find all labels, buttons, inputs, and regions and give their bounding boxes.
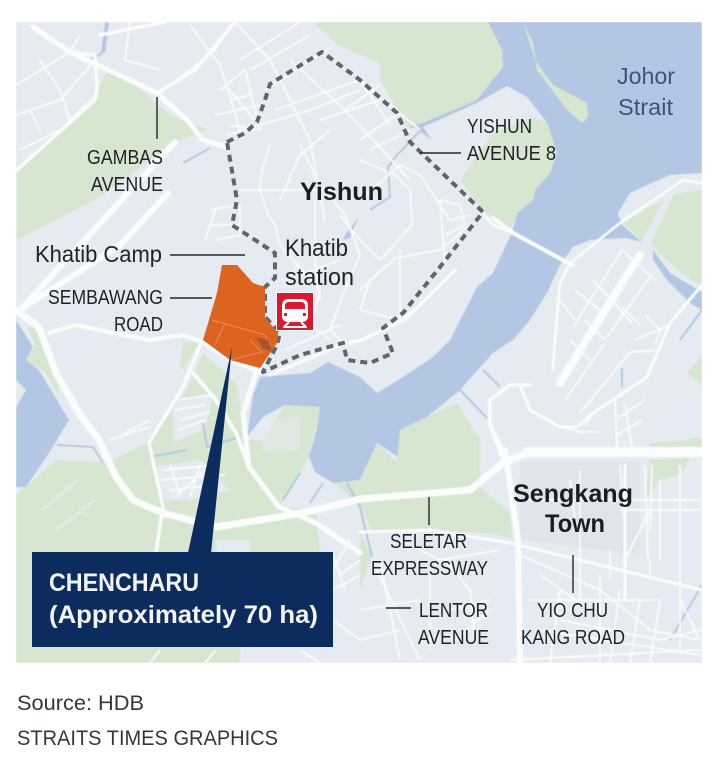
- label: Khatib Camp: Khatib Camp: [35, 241, 162, 267]
- label: Yio Chu Kang Road: [521, 600, 625, 649]
- label: Sembawang Road: SEMBAWANG: [48, 287, 163, 309]
- Yishun town boundary (dashed): [227, 52, 483, 372]
- label: Sembawang Road: ROAD: [114, 314, 163, 336]
- label: Lentor Avenue: [418, 600, 489, 649]
- label: Lentor Avenue: AVENUE: [418, 627, 489, 649]
- label: Gambas Avenue: [87, 147, 163, 196]
- label: Gambas Avenue: GAMBAS: [87, 147, 163, 169]
- built-up darker patch Sengkang: [520, 462, 640, 555]
- label: Johor Strait: [617, 63, 675, 120]
- callout box: Chencharu: [32, 552, 333, 647]
- map panel: [16, 22, 703, 663]
- source credit: [17, 692, 278, 750]
- waterways: [57, 22, 702, 640]
- green areas: [16, 22, 702, 663]
- water: Johor Strait and Seletar reservoir: [16, 22, 702, 487]
- label: Khatib station: [285, 235, 354, 291]
- source credit: Source: HDB: [17, 692, 144, 715]
- minor roads: [16, 22, 700, 663]
- major roads: [16, 22, 703, 663]
- label: Sembawang Road: [48, 287, 163, 336]
- pale stripes in green: [42, 480, 95, 530]
- label: Sengkang Town: Sengkang: [513, 480, 633, 508]
- label: Lentor Avenue: LENTOR: [419, 600, 488, 622]
- label: Sengkang Town: Town: [545, 510, 605, 538]
- label: Yishun Avenue 8: YISHUN: [467, 116, 532, 138]
- label: Khatib station: Khatib: [285, 235, 348, 262]
- callout box: Chencharu: CHENCHARU: [49, 569, 199, 597]
- land patches: [59, 196, 673, 552]
- source credit: STRAITS TIMES GRAPHICS: [17, 727, 278, 750]
- label: Yishun Avenue 8: [467, 116, 556, 165]
- label: Gambas Avenue: AVENUE: [91, 174, 163, 196]
- label: Seletar Expressway: [371, 531, 488, 580]
- label: Yio Chu Kang Road: KANG ROAD: [521, 627, 625, 649]
- label: Johor Strait: Johor: [617, 63, 675, 89]
- label: Yishun Avenue 8: AVENUE 8: [467, 143, 556, 165]
- callout box: Chencharu: (Approximately 70 ha): [49, 601, 318, 629]
- label: Seletar Expressway: EXPRESSWAY: [371, 558, 488, 580]
- leader lines: [157, 97, 573, 608]
- label: Yio Chu Kang Road: YIO CHU: [537, 600, 608, 622]
- icon: Khatib MRT station: [276, 292, 314, 331]
- label: Yishun: Yishun: [300, 178, 383, 206]
- label: Johor Strait: Strait: [618, 94, 674, 120]
- label: Seletar Expressway: SELETAR: [390, 531, 467, 553]
- label: Sengkang Town: [513, 480, 633, 538]
- label: Khatib station: station: [285, 264, 354, 291]
- Chencharu site (orange): [203, 265, 278, 368]
- site internal markings: [212, 320, 270, 360]
- callout pointer: [188, 347, 232, 553]
